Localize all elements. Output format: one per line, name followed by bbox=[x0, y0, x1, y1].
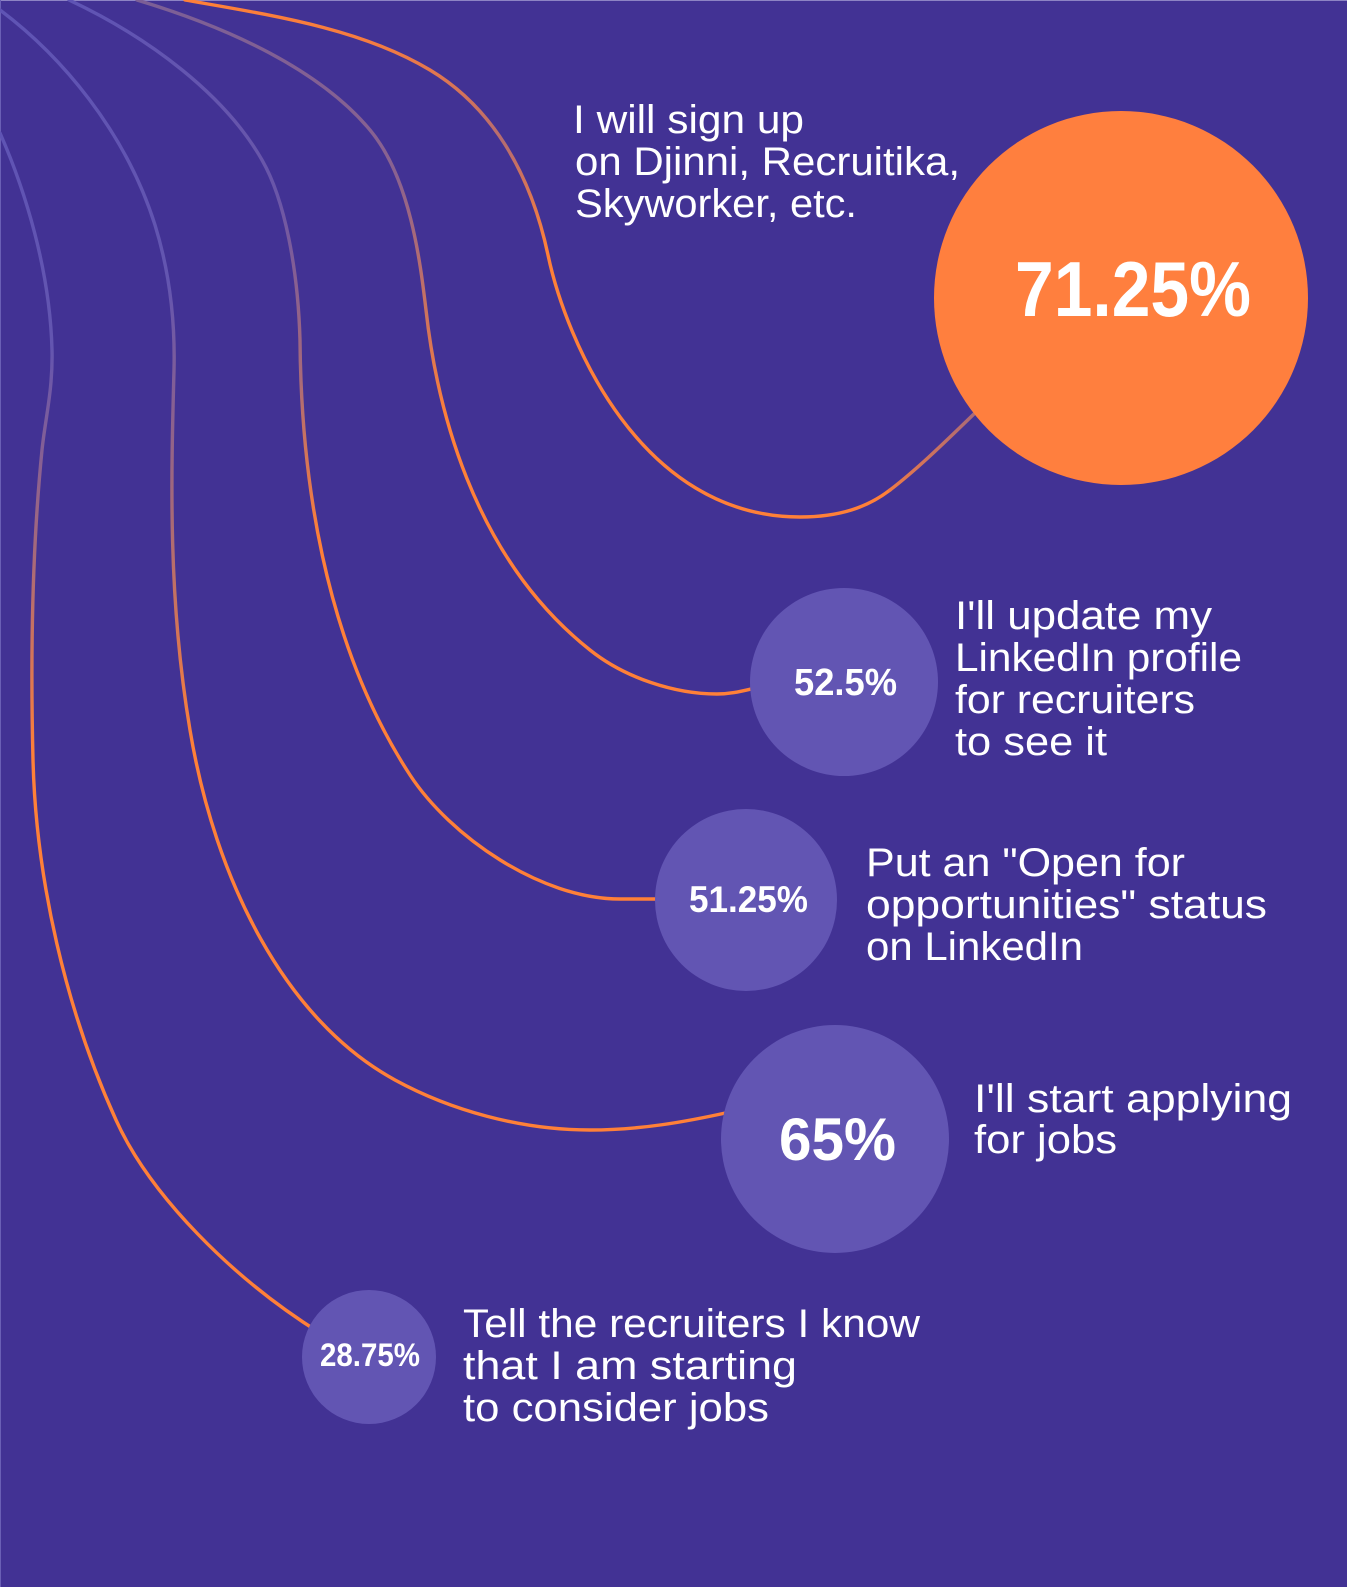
label: open for opportunities: Put an "Open for bbox=[866, 841, 1185, 885]
circle: 51.25% bbox=[655, 809, 837, 991]
label: update LinkedIn: to see it bbox=[955, 720, 1107, 764]
label: sign up: on Djinni, Recruitika, bbox=[575, 140, 960, 184]
item: open for opportunities, 51.25% bbox=[655, 809, 1267, 991]
label: update LinkedIn: for recruiters bbox=[955, 678, 1195, 722]
value: 52.5%: 52.5% bbox=[794, 662, 897, 704]
circle: 65% bbox=[721, 1025, 949, 1253]
label: start applying: I'll start applying bbox=[974, 1077, 1292, 1121]
circle: 71.25% bbox=[934, 111, 1308, 485]
label: sign up: I will sign up bbox=[573, 98, 804, 142]
label: tell recruiters: to consider jobs bbox=[463, 1386, 769, 1430]
circle: 28.75% bbox=[302, 1290, 436, 1424]
curve to 51.25% circle bbox=[69, 0, 660, 899]
curve to 71.25% circle bbox=[185, 0, 975, 517]
item: start applying, 65% bbox=[721, 1025, 1292, 1253]
value: 71.25%: 71.25% bbox=[1015, 245, 1251, 333]
label: update LinkedIn bbox=[955, 594, 1242, 764]
label: update LinkedIn: I'll update my bbox=[955, 594, 1212, 638]
label: sign up: Skyworker, etc. bbox=[575, 182, 857, 226]
label: update LinkedIn: LinkedIn profile bbox=[955, 636, 1242, 680]
curve to 52.5% circle bbox=[137, 0, 760, 694]
label: sign up bbox=[573, 98, 960, 226]
item: update LinkedIn, 52.5% bbox=[750, 588, 1242, 776]
value: 65%: 65% bbox=[779, 1106, 896, 1173]
label: open for opportunities: opportunities" status bbox=[866, 883, 1267, 927]
item: sign up on job sites, 71.25% bbox=[573, 98, 1308, 485]
label: open for opportunities: on LinkedIn bbox=[866, 925, 1083, 969]
curve to 65% circle bbox=[0, 10, 730, 1130]
label: open for opportunities bbox=[866, 841, 1267, 969]
label: start applying: for jobs bbox=[974, 1118, 1117, 1162]
circle: 52.5% bbox=[750, 588, 938, 776]
label: start applying bbox=[974, 1077, 1292, 1162]
value: 51.25%: 51.25% bbox=[689, 879, 808, 920]
curved connector lines bbox=[0, 0, 975, 1333]
label: tell recruiters: Tell the recruiters I know bbox=[463, 1302, 920, 1346]
label: tell recruiters: that I am starting bbox=[463, 1344, 797, 1388]
curve to 28.75% circle bbox=[0, 133, 320, 1333]
value: 28.75%: 28.75% bbox=[320, 1337, 420, 1373]
label: tell recruiters bbox=[463, 1302, 920, 1430]
item: tell recruiters, 28.75% bbox=[302, 1290, 920, 1430]
